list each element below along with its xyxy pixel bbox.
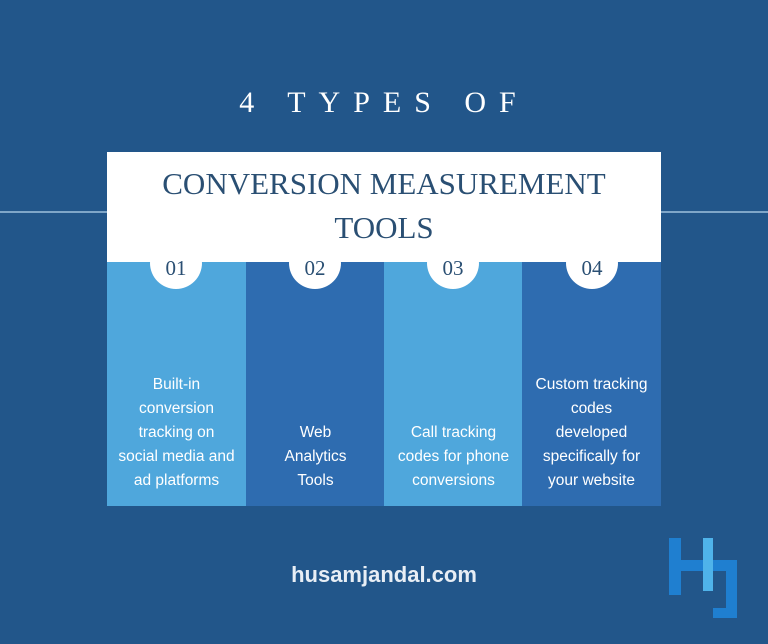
text 3 — [398, 424, 509, 489]
text 2: Tools — [297, 472, 334, 489]
text 3: conversions — [412, 472, 495, 489]
text 1: Built-in — [153, 376, 200, 393]
number 01: 01 — [166, 256, 186, 280]
number 03 — [427, 237, 479, 289]
text 2: Web — [300, 424, 331, 441]
text 4: specifically for — [543, 448, 640, 465]
text 4: Custom tracking — [536, 376, 647, 393]
icon: HJ logo — [669, 538, 737, 618]
text 1: tracking on — [139, 424, 214, 441]
text 1: ad platforms — [134, 472, 219, 489]
website url: husamjandal.com — [291, 562, 477, 587]
number 03: 03 — [442, 256, 464, 280]
title panel: CONVERSION MEASUREMENT — [162, 166, 606, 201]
column 1 — [107, 262, 246, 506]
column 4 — [522, 262, 661, 506]
text 4: codes — [571, 400, 612, 417]
text 4: developed — [556, 424, 627, 441]
column 2 — [246, 262, 385, 506]
title: 4 types of: 4 TYPES OF — [239, 86, 529, 119]
text 4: your website — [548, 472, 635, 489]
text 1: social media and — [118, 448, 235, 465]
number 01 — [150, 237, 202, 289]
number 04: 04 — [582, 256, 602, 280]
number 02 — [289, 237, 341, 289]
text 3: codes for phone — [398, 448, 509, 465]
text 3: Call tracking — [411, 424, 496, 441]
text 1 — [118, 376, 235, 489]
number 04 — [566, 237, 618, 289]
title panel — [107, 152, 661, 262]
title panel: TOOLS — [334, 210, 434, 245]
text 2 — [284, 424, 347, 489]
text 4 — [536, 376, 647, 489]
column 3 — [384, 262, 523, 506]
text 2: Analytics — [284, 448, 347, 465]
text 1: conversion — [139, 400, 214, 417]
number 02: 02 — [304, 256, 326, 280]
